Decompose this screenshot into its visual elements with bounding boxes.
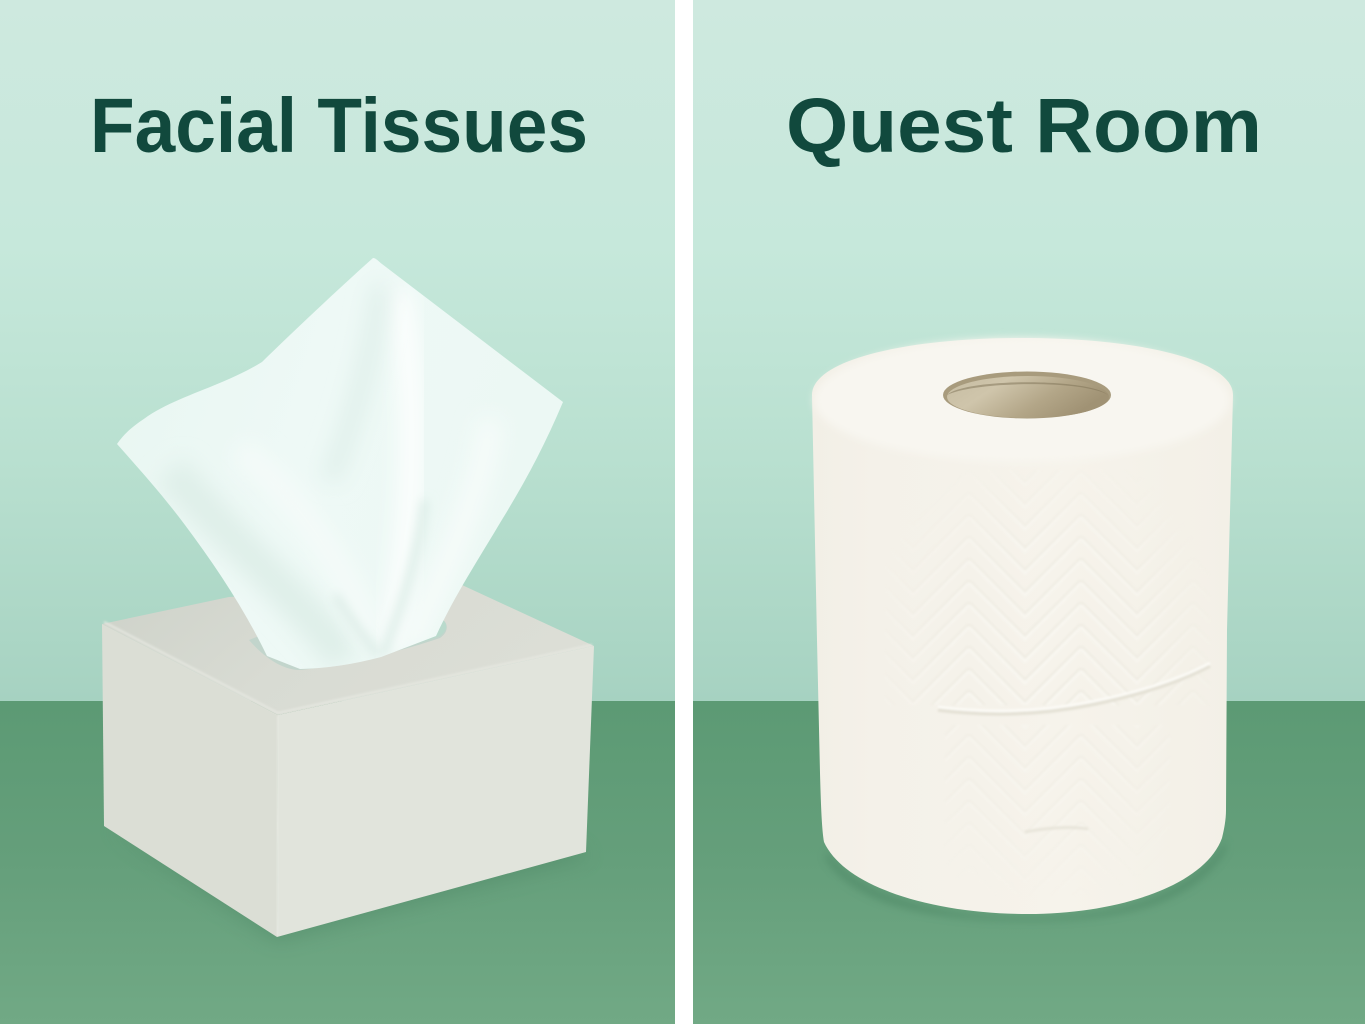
heading: Quest Room: Quest Room <box>786 83 1262 169</box>
panel: quest room <box>693 0 1365 1024</box>
icon: box shadow <box>108 826 590 941</box>
cardboard core <box>943 372 1111 418</box>
heading: Facial Tissues: Facial Tissues <box>90 83 588 169</box>
icon: tissue sheet <box>117 258 563 669</box>
wrap seam <box>938 663 1210 832</box>
icon: roll shadow <box>826 840 1226 921</box>
panel: facial tissues <box>0 0 675 1024</box>
chevron emboss lower <box>945 725 1170 895</box>
chevron emboss upper <box>885 470 1210 705</box>
icon: tissue box <box>102 585 594 937</box>
roll top face <box>814 338 1230 462</box>
icon: toilet paper roll <box>812 338 1233 914</box>
